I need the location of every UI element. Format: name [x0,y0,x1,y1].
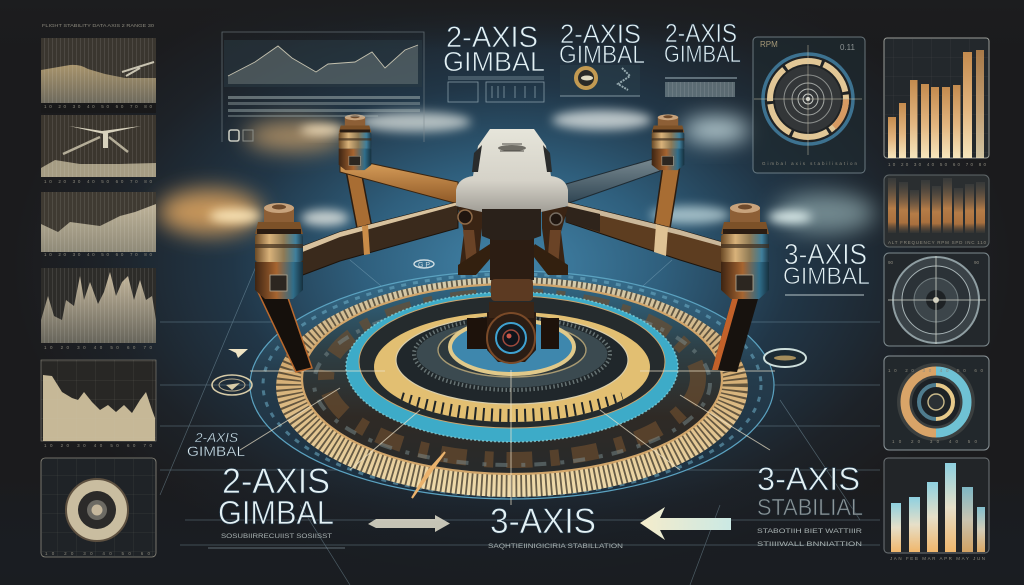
rear struts [345,165,372,228]
radial dial panel [753,37,865,173]
mini panel under heading 2 [560,65,640,96]
left panel 3: area chart: 10 20 30 40 50 60 70 80 [44,252,152,257]
blue ring [346,292,678,442]
left panel 4: spike chart [41,268,156,350]
heading: 2-axis gimbal top 2 [559,19,645,69]
heading: 3-axis gimbal right: 3-AXIS [784,239,867,271]
rotor glow: front centre right [650,206,730,224]
left panel 5: area chart: 10 20 30 40 50 60 70 [44,443,152,448]
rear left arm [340,157,458,204]
yellow ring [374,312,650,422]
heading: 3-axis stabilial bottom right: STABOTIIH BIET WATTIIIR [757,529,863,535]
right panel 4: donut dial: 10 20 30 40 50 [892,439,977,444]
heading: 2-axis gimbal bottom left [208,462,345,548]
left panel 3: area chart [41,192,156,257]
right panel 4: donut dial: 10 20 30 40 50 60 [888,368,983,373]
heading: 2-axis gimbal bottom left: SOSUBIIRRECUIIST SOSIISST [221,534,332,540]
heading: 3-axis stabilial bottom right: STABILIAL [757,494,863,520]
front right arm [566,202,735,276]
crosshair lines [240,370,775,505]
rotor glow: rear centre left [359,112,471,132]
mini panel under heading 3 [665,78,737,97]
radial dial panel: 0.11 [840,43,856,52]
left panel 1: area chart [41,23,156,113]
heading: 2-axis gimbal top 1: GIMBAL [443,46,545,77]
left panel 2: plane chart [41,115,156,184]
label: small 2-axis gimbal: 2-AXIS [194,430,238,445]
label: small 2-axis gimbal [187,430,245,459]
front left arm [298,202,458,276]
drone [255,114,769,372]
right panel 4: donut dial [884,356,989,450]
front right leg [712,292,760,372]
arrow: double headed left [368,515,450,532]
left panel 1: area chart: FLIGHT STABILITY DATA AXIS 2 RANGE 30 [42,23,155,28]
camera [467,302,559,363]
rear right arm [566,157,660,204]
heading: 2-axis gimbal top 3: GIMBAL [664,41,741,68]
heading: 3-axis bottom centre: SAQHTIEIINIGICIRIA STABILLATION [488,544,623,550]
front left leg [258,292,312,372]
icon: right ellipse badge [764,349,806,367]
rotor glow: rear centre right [552,110,652,130]
right panel 2: dim bar chart: ALT FREQUENCY RPM SPD INC 110 [888,240,986,245]
rotor glow: front centre left [301,210,349,226]
small floor labels near drone: G P [418,262,430,269]
top left data panel [222,32,424,142]
fuselage [456,129,568,240]
right panel 3: radar dial: 90 [974,260,980,265]
left panel 6: ring dial: 10 20 30 40 50 60 [45,551,150,556]
left panel 4: spike chart: 10 20 30 40 50 60 70 [44,345,152,350]
heading: 3-axis stabilial bottom right: STIIIIWALL BNNIATTION [757,542,862,548]
heading: 2-axis gimbal bottom left: GIMBAL [218,494,334,531]
heading: 2-axis gimbal top 3 [664,18,741,68]
left panel 6: ring dial [41,458,156,557]
front right motor [721,203,769,299]
right panel 5: gradient bar chart [884,458,989,561]
map band [302,284,722,474]
left panel 2: plane chart: 10 20 30 40 50 60 70 80 [44,179,152,184]
inner blue centre [450,320,574,374]
icon: star marker [228,349,248,358]
outer disc [250,271,774,499]
mini panel under heading 1 [448,77,544,102]
floor guide lines [160,245,880,585]
small floor labels near drone [414,260,434,269]
heading: 2-axis gimbal bottom left: 2-AXIS [222,462,330,501]
right panel 1: bar chart: 10 20 30 40 50 60 70 80 [888,162,986,167]
rotor glow: front left [158,189,262,235]
heading: 3-axis bottom centre: 3-AXIS [490,502,596,541]
right panel 3: radar dial [884,253,989,346]
label: small 2-axis gimbal: GIMBAL [187,443,245,459]
right panel 1: bar chart [884,38,989,167]
inner dark rings [414,318,610,390]
right panel 2: dim bar chart [884,175,989,247]
front left motor [255,203,303,299]
left panel 1: area chart: 10 20 30 40 50 60 70 80 [44,104,152,109]
rotor glow: rear left [245,121,345,151]
heading: 2-axis gimbal top 3: 2-AXIS [665,18,737,48]
left panel 5: area chart [41,360,156,448]
heading: 2-axis gimbal top 1 [443,21,545,77]
heading: 3-axis bottom centre [488,502,623,550]
heading: 3-axis gimbal right: GIMBAL [783,263,870,290]
arrow: pointing left [640,507,731,540]
radial dial panel: RPM [760,40,778,49]
radial dial panel: Gimbal axis stabilisation [762,161,857,166]
heading: 2-axis gimbal top 2: GIMBAL [559,41,645,69]
lightning marker [412,452,445,498]
rotor glow: front right [775,193,875,233]
outer gold tick band [276,277,748,497]
icon: left ellipse badge [212,375,252,395]
heading: 3-axis gimbal right [783,239,870,295]
heading: 3-axis stabilial bottom right [757,461,863,548]
radial hud rings [240,271,775,505]
gimbal frame [458,207,568,301]
rotor glow: rear right [682,117,750,143]
heading: 2-axis gimbal top 2: 2-AXIS [560,19,641,49]
right panel 3: radar dial: 90 [888,260,894,265]
rear left motor [339,114,371,170]
right panel 5: gradient bar chart: JAN FEB MAR APR MAY JUN [890,556,985,561]
rear right motor [652,114,684,170]
heading: 2-axis gimbal top 1: 2-AXIS [446,21,538,54]
heading: 3-axis stabilial bottom right: 3-AXIS [757,461,860,497]
